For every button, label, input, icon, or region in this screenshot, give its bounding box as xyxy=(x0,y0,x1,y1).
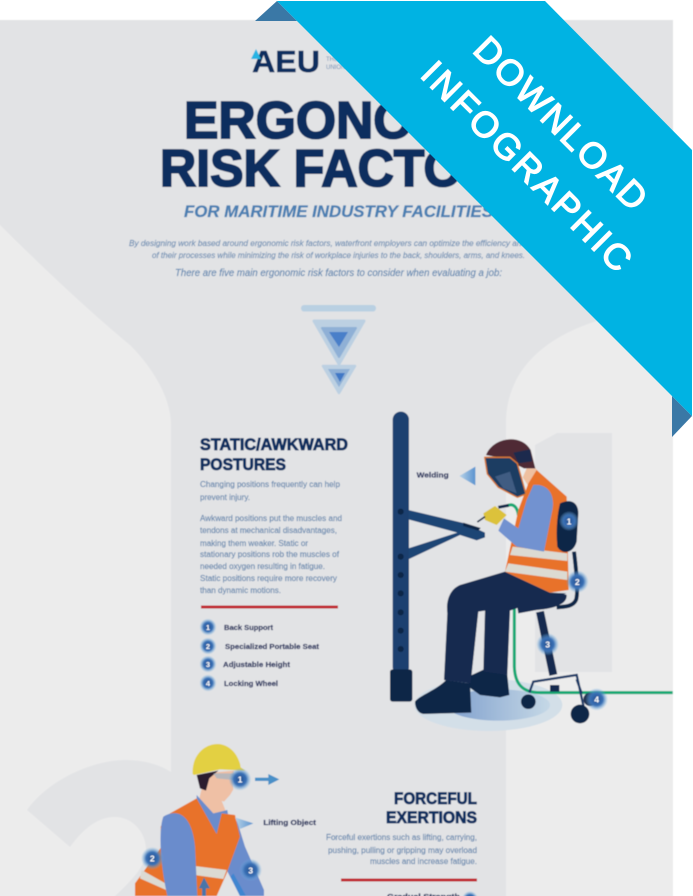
numbered legend: 2 xyxy=(206,642,210,651)
section 2 text xyxy=(326,790,478,896)
body copy: Changing positions frequently can help xyxy=(200,480,341,489)
worker figure xyxy=(135,744,264,896)
big numeral 2 xyxy=(27,760,171,896)
section 1 text xyxy=(200,436,348,692)
seat and back support xyxy=(517,501,578,613)
title: RISK FACTORS xyxy=(160,140,532,198)
body copy: stationary positions rob the muscles of xyxy=(200,550,340,559)
welder callout badges: 4 xyxy=(594,695,599,705)
body copy xyxy=(200,480,342,595)
body copy: Awkward positions put the muscles and xyxy=(200,514,342,523)
welder callout badges xyxy=(536,511,608,711)
heading: static/awkward postures: STATIC/AWKWARD xyxy=(200,436,348,454)
numbered legend: Adjustable Height xyxy=(223,660,291,669)
body copy: making them weaker. Static or xyxy=(200,539,308,548)
welder figure xyxy=(415,439,569,714)
numbered legend: Specialized Portable Seat xyxy=(225,642,320,651)
title: ERGONOMIC xyxy=(184,92,508,150)
illustration: worker lifting xyxy=(135,744,317,896)
body copy: than dynamic motions. xyxy=(200,586,281,595)
illustration: seated welder xyxy=(390,412,673,731)
ribbon text: DOWNLOAD xyxy=(466,28,656,218)
logo: UNION xyxy=(326,65,345,71)
body copy: needed oxygen resulting in fatigue. xyxy=(200,562,325,571)
numbered legend: Back Support xyxy=(224,623,273,632)
welder callout badges: 3 xyxy=(545,640,550,650)
forceful exertions body copy: pushing, pulling or gripping may overload xyxy=(328,846,477,855)
numbered legend: Locking Wheel xyxy=(224,679,278,688)
welder callout badges: 1 xyxy=(567,516,572,526)
numbered legend: 3 xyxy=(206,660,210,669)
down arrow icon xyxy=(301,305,376,393)
big numeral 1 xyxy=(535,433,612,672)
intro text: of their processes while minimizing the risk of workplace injuries to the back, shoulders, arms, and knees. xyxy=(152,251,525,260)
forceful exertions body copy xyxy=(326,833,477,866)
worker callout badges: 2 xyxy=(150,854,155,864)
intro text: By designing work based around ergonomic risk factors, waterfront employers can optimize the efficiency and xyxy=(129,239,527,248)
numbered legend xyxy=(200,618,320,692)
logo: AEU xyxy=(252,44,320,79)
stool xyxy=(521,612,597,723)
heading: forceful exertions: EXERTIONS xyxy=(386,809,477,827)
welding post xyxy=(390,412,485,702)
download ribbon xyxy=(255,1,692,437)
worker callout badges xyxy=(141,768,262,881)
numbered legend: 1 xyxy=(206,623,210,632)
intro text xyxy=(129,239,527,279)
welding label: Welding xyxy=(417,470,449,479)
logo: THE xyxy=(326,57,338,63)
worker callout badges: 3 xyxy=(248,865,253,875)
forceful exertions body copy: muscles and increase fatigue. xyxy=(370,857,477,866)
heading: static/awkward postures xyxy=(200,436,348,474)
welding label xyxy=(417,467,475,485)
heading: forceful exertions: FORCEFUL xyxy=(394,790,477,808)
body copy: tendons at mechanical disadvantages, xyxy=(200,526,337,535)
title xyxy=(160,92,532,198)
heading: static/awkward postures: POSTURES xyxy=(200,456,286,474)
ribbon text: INFOGRAPHIC xyxy=(413,53,640,280)
forceful exertions legend xyxy=(387,891,478,896)
force arrows xyxy=(199,774,279,896)
body copy: prevent injury. xyxy=(200,493,250,502)
intro text: There are five main ergonomic risk factors to consider when evaluating a job: xyxy=(175,268,502,279)
worker callout badges: 1 xyxy=(238,775,243,785)
lifting object label: Lifting Object xyxy=(263,818,317,827)
welder callout badges: 2 xyxy=(575,577,580,587)
logo xyxy=(251,44,345,79)
heading: forceful exertions xyxy=(386,790,477,827)
body copy: Static positions require more recovery xyxy=(200,574,337,583)
forceful exertions body copy: Forceful exertions such as lifting, carrying, xyxy=(326,833,477,842)
subtitle: FOR MARITIME INDUSTRY FACILITIES xyxy=(184,202,494,221)
numbered legend: 4 xyxy=(206,679,211,688)
